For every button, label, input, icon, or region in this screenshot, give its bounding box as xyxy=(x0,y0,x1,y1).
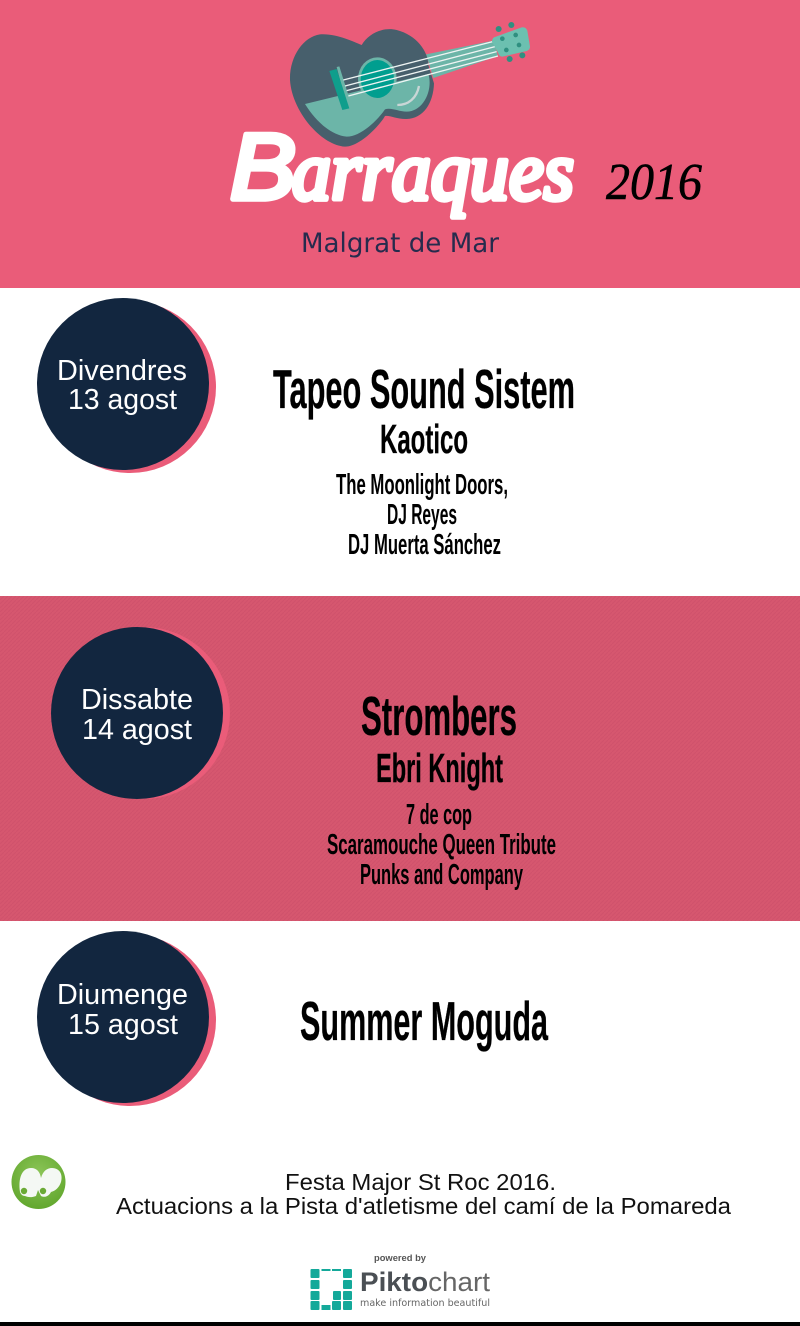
date badge: Dissabte 14 agost xyxy=(51,627,230,799)
lineup: Friday: DJ Muerta Sánchez xyxy=(348,529,501,561)
date badge: Dissabte 14 agost: 14 agost xyxy=(82,714,192,746)
lineup: Saturday xyxy=(327,685,556,891)
lineup: Friday: The Moonlight Doors, xyxy=(336,469,508,501)
title: Barraques: B xyxy=(230,114,296,219)
title: Barraques: arraques xyxy=(292,125,574,218)
icon: green RP logo xyxy=(12,1155,66,1209)
logo: Piktochart xyxy=(310,1253,491,1310)
panel: header xyxy=(0,0,800,288)
date badge: Dissabte 14 agost: Dissabte xyxy=(81,684,193,716)
lineup: Saturday: Scaramouche Queen Tribute xyxy=(327,829,556,861)
footer note: Festa Major St Roc 2016. xyxy=(285,1169,556,1195)
lineup: Saturday: 7 de cop xyxy=(406,799,472,831)
panel: Saturday xyxy=(0,596,800,921)
footer note: Actuacions a la Pista d'atletisme del camí de la Pomareda xyxy=(116,1193,732,1219)
date badge: Diumenge 15 agost xyxy=(37,931,216,1106)
logo: Piktochart: powered by xyxy=(374,1253,427,1264)
bottom bar xyxy=(0,1322,800,1326)
icon: guitar xyxy=(290,22,530,147)
lineup: Friday: Tapeo Sound Sistem xyxy=(273,358,575,420)
lineup: Friday: DJ Reyes xyxy=(387,499,457,531)
lineup: Sunday: Summer Moguda xyxy=(300,990,548,1052)
footer note xyxy=(116,1169,732,1219)
logo: Piktochart: make information beautiful xyxy=(360,1298,490,1309)
date badge: Divendres 13 agost xyxy=(37,298,216,473)
icon: Piktochart mark xyxy=(310,1269,352,1310)
panel: Sunday xyxy=(37,931,548,1106)
date badge: Divendres 13 agost: 13 agost xyxy=(68,384,177,416)
lineup: Saturday: Strombers xyxy=(361,685,517,747)
year: 2016: 2016 xyxy=(606,154,702,211)
lineup: Saturday: Ebri Knight xyxy=(376,745,503,791)
panel: Friday xyxy=(37,298,575,561)
subtitle: Malgrat de Mar: Malgrat de Mar xyxy=(301,228,500,259)
lineup: Friday xyxy=(273,358,575,561)
lineup: Friday: Kaotico xyxy=(380,416,468,462)
date badge: Diumenge 15 agost: 15 agost xyxy=(68,1009,178,1041)
lineup: Saturday: Punks and Company xyxy=(360,859,523,891)
logo: Piktochart: Piktochart xyxy=(360,1267,491,1297)
date badge: Divendres 13 agost: Divendres xyxy=(57,355,187,387)
date badge: Diumenge 15 agost: Diumenge xyxy=(57,979,188,1011)
